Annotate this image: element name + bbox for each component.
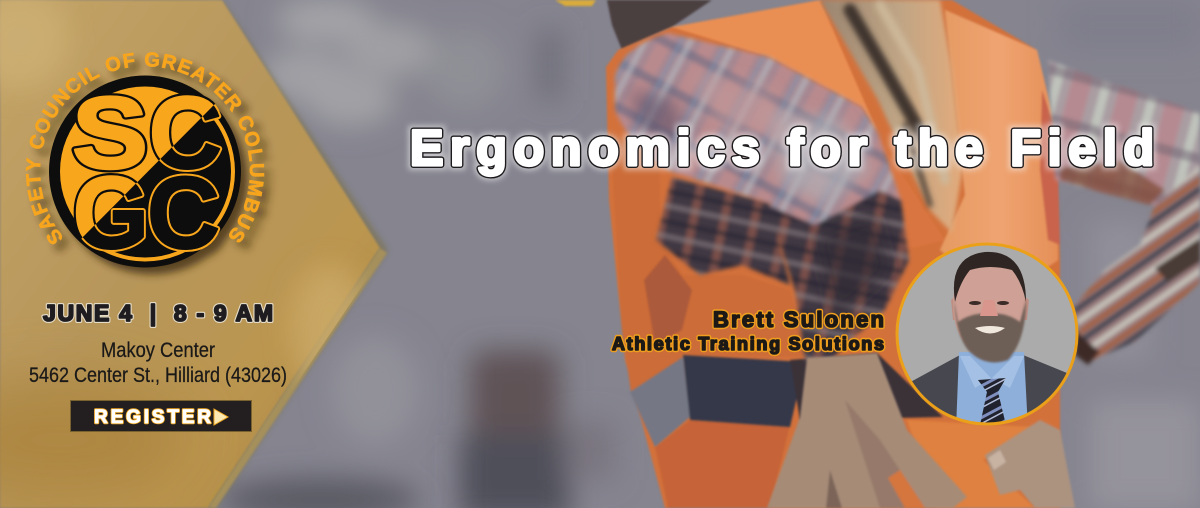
hair [820,0,963,233]
eyes [969,301,981,305]
logo: Safety Council of Greater Columbus [26,52,274,280]
title: Ergonomics for the Field [410,120,1154,176]
sleeve tone [630,70,890,320]
left hand [767,353,967,508]
venue address: 5462 Center St., Hilliard (43026) [29,364,287,387]
beard [954,300,1026,362]
SC monogram, upper half: G [73,156,149,270]
gold pentagon panel [0,0,388,508]
SC monogram, upper half: C [149,76,222,190]
date and time: JUNE 4 | 8 - 9 AM [43,300,273,326]
GC monogram, lower half: G [73,156,149,270]
title: Ergonomics for the Field [410,120,1154,176]
ears [951,296,1029,320]
curved organisation name: SAFETY COUNCIL OF GREATER COLUMBUS [26,52,274,255]
nose [980,300,998,316]
register button: REGISTER [94,407,211,428]
icon: arrow [214,409,228,425]
vest body [606,0,1060,508]
GC monogram, lower half: C [147,156,220,270]
speaker name and company: Brett Sulonen [713,307,884,332]
register button: REGISTER [94,407,211,428]
GC monogram, lower half: C [149,76,222,190]
jacket [912,356,1066,417]
mouth [975,326,1005,334]
GC monogram, lower half: C [147,156,220,270]
reflective band [630,353,943,447]
title: Ergonomics for the Field [410,120,1154,176]
logo disc [49,76,241,270]
SC monogram, upper half: S [72,76,148,190]
right sleeve [1048,60,1200,365]
worker in safety vest [555,0,1200,508]
SC monogram, upper half: G [73,156,149,270]
GC monogram, lower half [81,104,228,256]
register button [70,400,252,432]
neck and helmet [555,0,712,50]
hair [954,252,1026,302]
tie [978,378,1006,425]
speaker name and company: Athletic Training Solutions [612,334,884,354]
date and time: JUNE 4 | 8 - 9 AM [43,300,273,326]
SC monogram, upper half: C [149,76,222,190]
speaker name and company: Brett Sulonen [713,307,884,332]
SC monogram, upper half [71,93,226,238]
venue address: Makoy Center [101,339,215,362]
GC monogram, lower half: C [149,76,222,190]
venue address [29,339,287,387]
right hand [985,420,1075,508]
speaker name and company [612,307,884,354]
speaker portrait [897,244,1080,430]
face [953,267,1025,340]
left sleeve [615,33,909,362]
GC monogram, lower half: G [73,156,149,270]
speaker name and company: Athletic Training Solutions [612,334,884,354]
shirt [956,352,1028,422]
SC monogram, upper half: S [72,76,148,190]
collar [960,356,1024,388]
